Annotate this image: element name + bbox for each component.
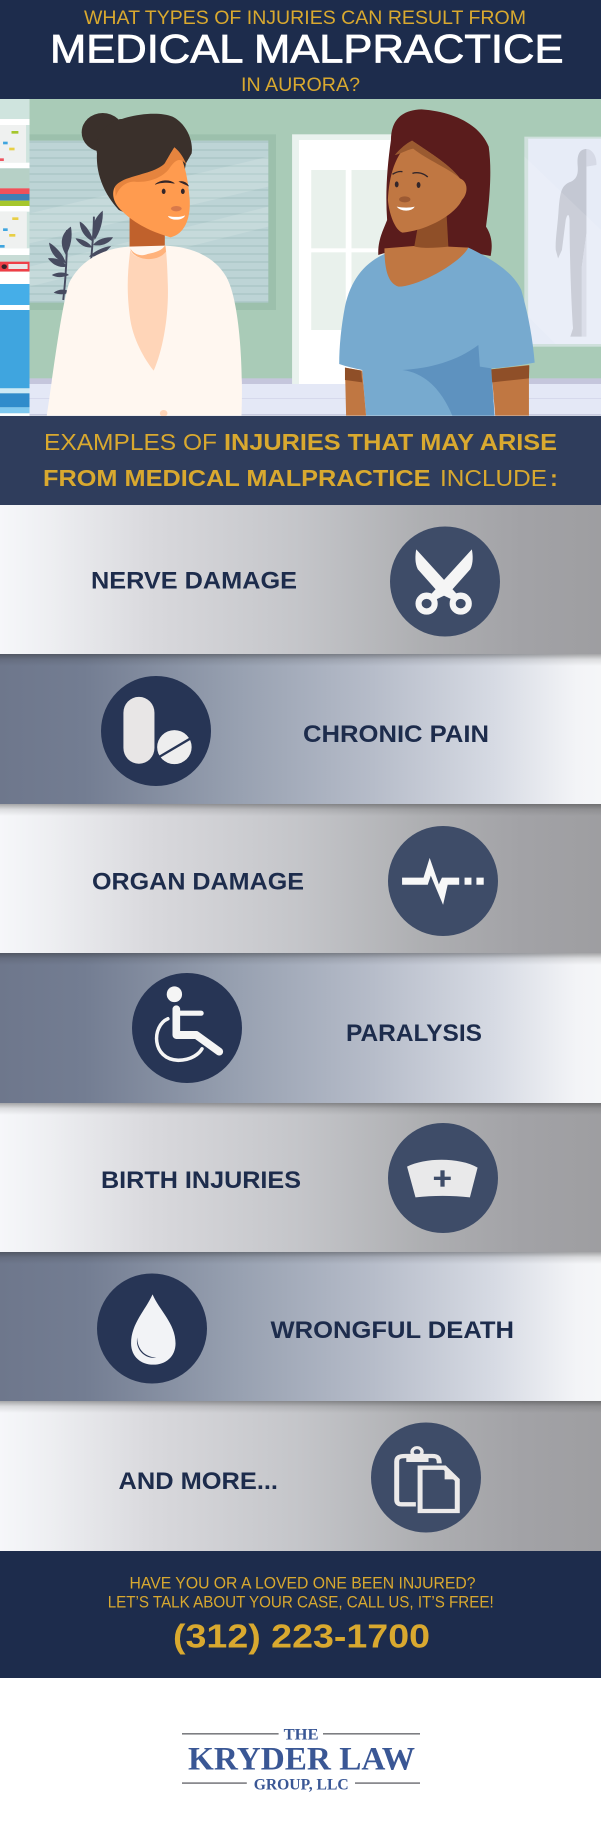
list band: birth injuries [0,1103,601,1252]
label: AND MORE... [118,1468,278,1495]
logo: The Kryder Law Group, LLC: KRYDER LAW [188,1741,415,1777]
header banner [0,0,601,99]
doctor neck [130,217,165,255]
list band: nerve damage [0,505,601,654]
list band: organ damage [0,804,601,953]
doctor features [162,189,166,194]
plant [48,211,113,300]
list band: and more [0,1401,601,1551]
door [292,134,396,384]
illustration: doctor and patient in clinic [0,99,601,417]
subheading text [43,429,558,491]
patient shirt [339,248,535,416]
doctor collar [128,246,168,371]
subheading text: : [550,465,558,491]
doctor lab coat [47,246,242,416]
patient face [388,141,467,233]
icon: blood drop [97,1274,207,1384]
icon: wheelchair [132,973,242,1083]
label: BIRTH INJURIES [101,1167,301,1194]
wall [30,99,601,416]
anatomy poster [524,137,601,347]
icon: pills [101,676,211,786]
label: PARALYSIS [346,1020,482,1047]
logo: The Kryder Law Group, LLC: THE [284,1726,319,1744]
label: ORGAN DAMAGE [92,868,304,896]
heading line 1: WHAT TYPES OF INJURIES CAN RESULT FROM [84,7,526,29]
label: CHRONIC PAIN [303,721,489,748]
patient chest [384,246,468,287]
patient neck [414,213,448,248]
icon: scissors [390,526,500,636]
icon: heartbeat [388,826,498,936]
call to action banner [0,1551,601,1678]
patient features [395,181,399,187]
subheading text: INJURIES THAT MAY ARISE [224,429,557,455]
icon: nurse cap [388,1123,498,1233]
logo: The Kryder Law Group, LLC [182,1726,420,1793]
logo: The Kryder Law Group, LLC: GROUP, LLC [254,1776,349,1793]
doctor face [113,147,190,237]
subheading text: INCLUDE [440,465,547,491]
floor [30,378,601,416]
shelf unit [0,99,30,416]
doctor hair [82,113,192,213]
subheading text: FROM MEDICAL MALPRACTICE [43,465,431,491]
question text: HAVE YOU OR A LOVED ONE BEEN INJURED? [130,1575,476,1593]
list band: wrongful death [0,1252,601,1401]
patient hair [378,109,492,256]
window with blinds [30,134,276,310]
label: NERVE DAMAGE [91,568,297,594]
doctor [47,113,242,417]
subheading banner [0,416,601,505]
list band: paralysis [0,953,601,1103]
icon: clipboard [371,1422,481,1532]
patient [339,109,535,416]
label: WRONGFUL DEATH [270,1317,514,1344]
phone number: (312) 223-1700 [173,1618,430,1655]
patient arms [345,368,366,416]
call invitation text: LET’S TALK ABOUT YOUR CASE, CALL US, IT’S FREE! [108,1594,494,1612]
subheading text: EXAMPLES OF [44,429,217,455]
heading line 3: IN AURORA? [241,74,360,96]
main title: MEDICAL MALPRACTICE [50,28,564,72]
list band: chronic pain [0,654,601,804]
